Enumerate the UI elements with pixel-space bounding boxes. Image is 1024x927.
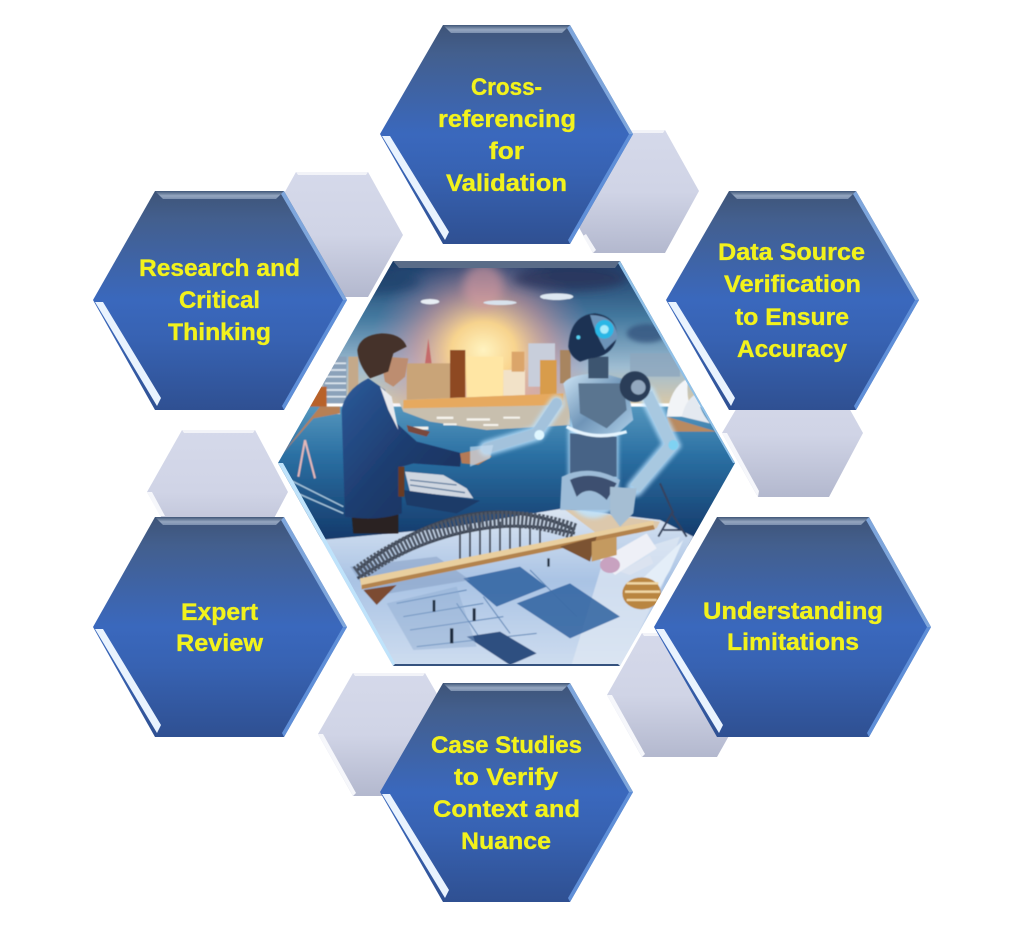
small hexagon: behind case studies [318, 673, 460, 796]
label: Thinking [168, 319, 271, 346]
label: Validation [446, 170, 567, 197]
central hexagon picture: handshake between man and robot over harbour bridge [270, 250, 740, 670]
people on blueprint [433, 558, 550, 643]
blueprint drawing [463, 567, 620, 638]
rolled plans [600, 533, 657, 575]
hexagon: case studies to verify context and nuance [380, 683, 633, 902]
robot [470, 313, 678, 527]
small hexagon: behind expert review [147, 430, 288, 554]
label: Data Source [718, 239, 865, 266]
label: for [489, 138, 524, 165]
label: Review [176, 630, 264, 657]
small hexagon: behind cross-referencing [559, 130, 699, 253]
bridge [357, 512, 655, 605]
wake lines [290, 480, 343, 513]
man in suit [342, 333, 492, 533]
small crane on table [658, 483, 687, 537]
label: Understanding [703, 598, 883, 625]
label [703, 598, 883, 656]
hexagon: research and critical thinking [93, 191, 347, 410]
label: Context and [433, 796, 580, 823]
label [176, 599, 264, 657]
crane left [298, 440, 315, 478]
label: Case Studies [431, 732, 582, 759]
label: Nuance [461, 828, 551, 855]
label: to Ensure [735, 304, 849, 331]
small hexagon: behind understanding limitations [607, 633, 752, 757]
label: Verification [724, 271, 861, 298]
small hexagon: behind research [261, 172, 403, 297]
cruise ship [405, 472, 473, 498]
label: Research and [139, 255, 300, 282]
label [431, 732, 582, 855]
skyline [630, 357, 680, 377]
label [438, 74, 576, 197]
hexagon: cross-referencing for validation [380, 25, 633, 244]
label: Accuracy [737, 336, 847, 363]
label: Expert [181, 599, 258, 626]
label: Critical [179, 287, 260, 314]
label [718, 239, 865, 363]
label [139, 255, 300, 346]
gold coil [622, 577, 661, 609]
label: Cross- [471, 74, 542, 101]
hexagon: data source verification to ensure accuracy [666, 191, 919, 410]
small hexagon: behind data source [722, 372, 863, 497]
hexagon: understanding limitations [654, 517, 931, 737]
hexagon: expert review [93, 517, 347, 737]
label: referencing [438, 106, 576, 133]
label: Limitations [727, 629, 859, 656]
opera house [667, 417, 717, 432]
label: to Verify [454, 764, 558, 791]
water and marina [270, 407, 740, 547]
picture bevel edges [393, 261, 620, 268]
sky [321, 261, 702, 404]
blueprint table [320, 508, 693, 670]
